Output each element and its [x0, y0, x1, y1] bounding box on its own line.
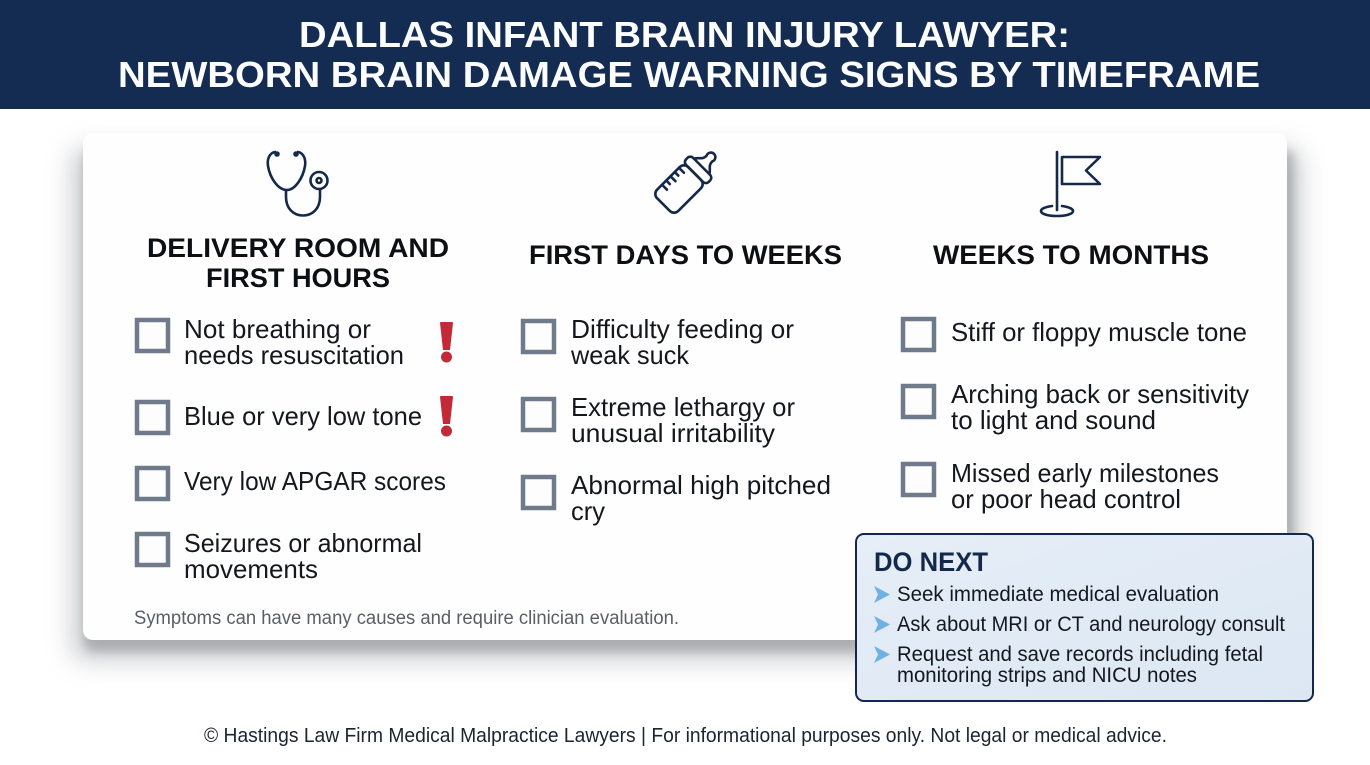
column: weeks to months: [903, 152, 1249, 514]
item: milestones: [903, 458, 1219, 514]
column: first days to weeks: [523, 143, 842, 526]
panel: main card: [72, 133, 1300, 660]
item: milestones: or poor head control: [951, 484, 1181, 514]
item: blue or low tone: Blue or very low tone: [184, 401, 422, 431]
callout heading: DO NEXT: [874, 547, 988, 577]
item: lethargy: [523, 392, 795, 448]
item: seizures: [137, 528, 422, 584]
step: save records: [874, 643, 1263, 687]
item: high pitched cry: cry: [571, 496, 605, 526]
item: difficulty feeding: Difficulty feeding or: [571, 314, 794, 344]
item: not breathing: [137, 314, 404, 370]
step: save records: Request and save records including fetal: [897, 643, 1263, 666]
icon: stethoscope: [268, 152, 328, 216]
step: save records: monitoring strips and NICU notes: [897, 664, 1197, 687]
header banner: DALLAS INFANT BRAIN INJURY LAWYER:: [299, 14, 1070, 55]
item: difficulty feeding: [523, 314, 794, 370]
item: seizures: Seizures or abnormal: [184, 528, 422, 558]
footer: © Hastings Law Firm Medical Malpractice Lawyers | For informational purposes only. Not legal or medical advice.: [204, 725, 1167, 747]
icon: red exclamation: [440, 396, 453, 436]
heading: delivery room: [147, 233, 449, 293]
item: arching back: to light and sound: [951, 405, 1156, 435]
item: milestones: Missed early milestones: [951, 458, 1219, 488]
callout: do next: [856, 534, 1313, 701]
item: arching back: Arching back or sensitivity: [951, 379, 1249, 409]
heading: delivery room: FIRST HOURS: [206, 263, 390, 293]
heading: first days: FIRST DAYS TO WEEKS: [529, 240, 842, 270]
heading: weeks to months: WEEKS TO MONTHS: [933, 240, 1209, 270]
item: difficulty feeding: weak suck: [570, 340, 690, 370]
step: medical evaluation: Seek immediate medical evaluation: [897, 583, 1219, 606]
column: delivery room and first hours: [137, 152, 453, 584]
item: high pitched cry: Abnormal high pitched: [571, 470, 831, 500]
item: lethargy: Extreme lethargy or: [571, 392, 795, 422]
item: not breathing: Not breathing or: [184, 314, 371, 344]
item: lethargy: unusual irritability: [571, 418, 775, 448]
icon: red exclamation: [440, 322, 453, 362]
step: MRI or CT: Ask about MRI or CT and neurology consult: [897, 613, 1285, 636]
icon: baby bottle: [652, 143, 725, 216]
item: muscle tone: Stiff or floppy muscle tone: [951, 317, 1247, 347]
heading: delivery room: DELIVERY ROOM AND: [147, 233, 449, 263]
footnote: Symptoms can have many causes and require clinician evaluation.: [134, 608, 679, 629]
header banner: NEWBORN BRAIN DAMAGE WARNING SIGNS BY TIMEFRAME: [118, 54, 1260, 95]
item: apgar: Very low APGAR scores: [184, 466, 446, 496]
header banner: [0, 0, 1370, 109]
item: not breathing: needs resuscitation: [184, 340, 404, 370]
item: seizures: movements: [184, 554, 318, 584]
icon: flag: [1041, 152, 1100, 216]
item: arching back: [903, 379, 1249, 435]
item: high pitched cry: [523, 470, 831, 526]
